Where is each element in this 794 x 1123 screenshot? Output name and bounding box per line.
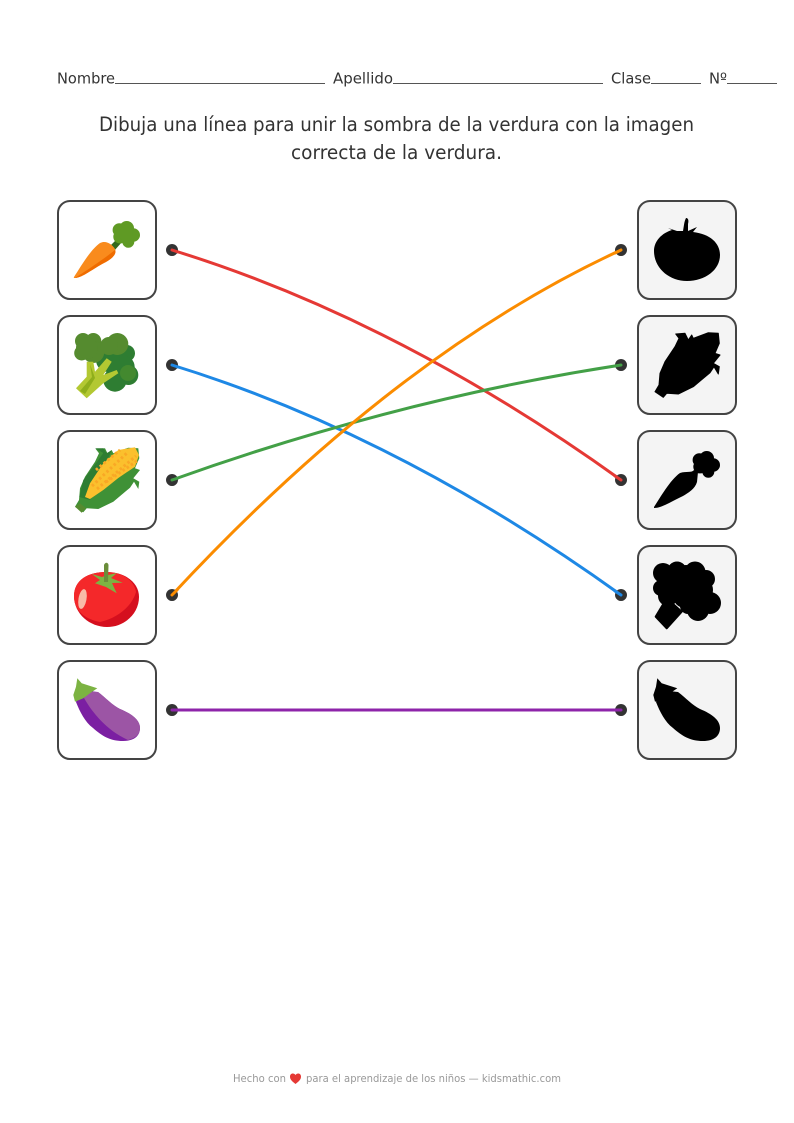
right shadow cards [638,201,736,759]
silhouette: tomato [654,218,720,281]
right dots [615,244,627,716]
connecting line: blue [172,365,621,595]
name fields header: Nombre [57,70,115,88]
connecting line: green [172,365,621,480]
title instructions [99,113,694,164]
connecting line: red [172,250,621,480]
footer credit: Hecho con [233,1072,286,1085]
line ends over dots [172,250,621,710]
name fields header: Clase [611,70,651,88]
name fields header [57,70,777,88]
left dots [166,244,178,716]
connecting line: orange [172,250,621,595]
icon: corn [75,447,140,513]
icon: heart [290,1073,301,1084]
left picture cards [58,201,156,759]
silhouette: corn [655,333,720,397]
title instructions: Dibuja una línea para unir la sombra de la verdura con la imagen [99,113,694,136]
connecting line: purple [172,708,621,712]
icon: carrot [74,221,140,278]
name fields header: Apellido [333,70,393,88]
title instructions: correcta de la verdura. [291,141,502,164]
name fields header: Nº [709,70,727,88]
footer credit: para el aprendizaje de los niños — kidsmathic.com [306,1072,561,1085]
icon: tomato [74,563,139,627]
silhouette: carrot [654,451,720,508]
icon: eggplant [73,678,140,741]
icon: broccoli [74,333,138,398]
silhouette: broccoli [653,562,721,628]
silhouette: eggplant [653,678,720,741]
